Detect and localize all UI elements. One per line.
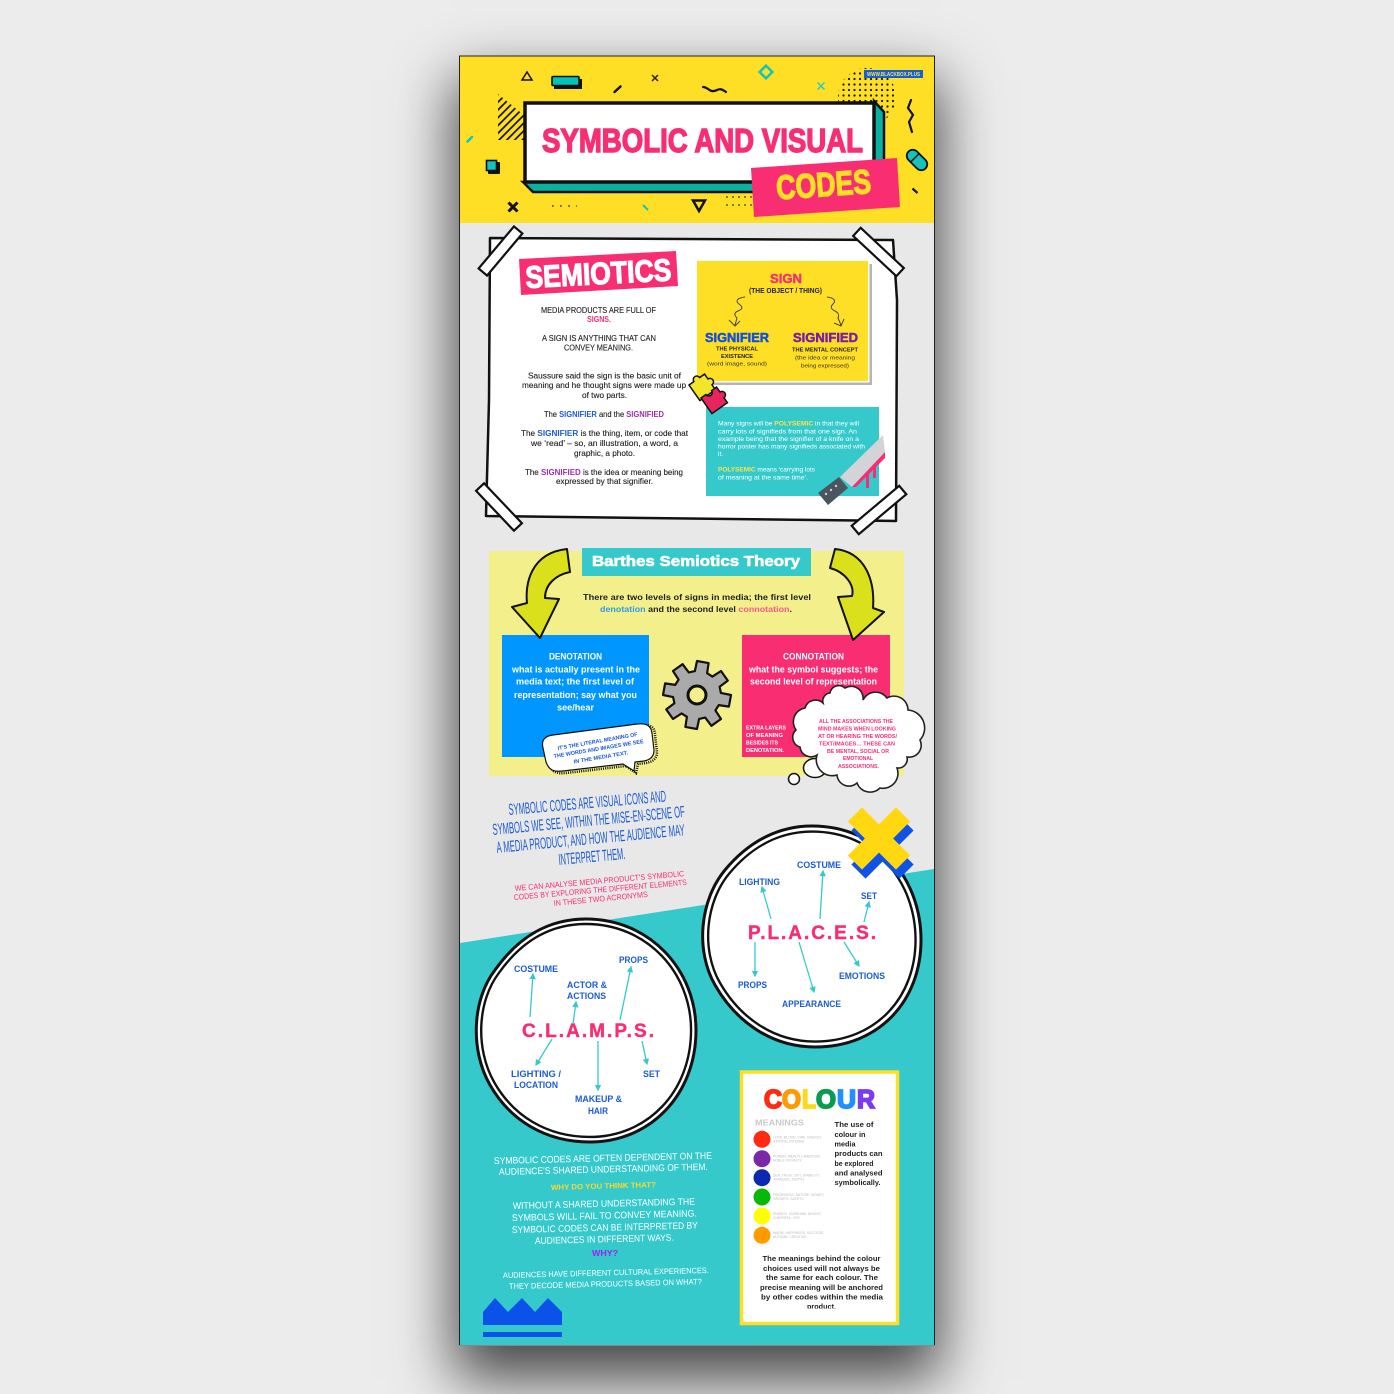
clamps labels: SET <box>643 1069 660 1080</box>
panel: colour card <box>742 1072 898 1324</box>
panel: polysemic box: example being that the signifier of a knife on a <box>718 436 859 443</box>
places labels <box>738 860 885 1010</box>
heading: colour: U <box>837 1084 856 1114</box>
callout: associations thought cloud: ASSOCIATIONS. <box>838 764 879 770</box>
text: A MEDIA PRODUCT, AND HOW THE AUDIENCE MAY <box>496 822 686 857</box>
icon: teal cross <box>818 82 824 90</box>
text block: semiotics intro: meaning and he thought signs were made up <box>522 381 687 390</box>
panel: polysemic box: carry lots of signifieds from that one sign. An <box>718 428 857 436</box>
text block: analyse acronyms: WE CAN ANALYSE MEDIA PRODUCT'S SYMBOLIC <box>514 869 685 893</box>
arrow: right curved <box>830 549 884 640</box>
clamps labels: ACTIONS <box>567 991 606 1002</box>
icon: small teal slash <box>643 205 648 210</box>
panel: clamps circle <box>476 919 696 1142</box>
heading: colour: R <box>857 1084 875 1114</box>
clamps labels: LOCATION <box>514 1080 558 1091</box>
codes banner: CODES <box>775 163 872 207</box>
text block: two levels: denotation and the second level connotation . <box>600 604 792 614</box>
colour meanings list <box>773 1136 824 1239</box>
panel: sign diagram card <box>696 260 872 385</box>
panel: denotation: media text; the first level of <box>516 676 635 686</box>
text block: semiotics intro: CONVEY MEANING. <box>564 344 633 352</box>
places labels: APPEARANCE <box>782 999 841 1010</box>
tape: top right <box>853 228 904 276</box>
icon: pill <box>904 147 930 173</box>
text block: shared understanding: WITHOUT A SHARED UNDERSTANDING THE <box>513 1197 695 1212</box>
signifier column: (word image, sound) <box>707 362 767 368</box>
icon: zigzag <box>908 100 913 132</box>
panel: polysemic box: it. <box>718 451 723 458</box>
text block: semiotics intro: MEDIA PRODUCTS ARE FULL OF <box>541 306 656 315</box>
meanings subheading: MEANINGS <box>755 1118 805 1128</box>
icon: hatched triangle <box>498 94 525 140</box>
text block: shared understanding: SYMBOLIC CODES CAN BE INTERPRETED BY <box>512 1220 699 1236</box>
text block: colour anchoring: by other codes within the media <box>761 1292 884 1302</box>
text block: semiotics intro: The SIGNIFIER and the SIGNIFIED <box>544 410 664 419</box>
clamps labels: COSTUME <box>514 964 558 975</box>
icon: small cross <box>652 75 658 81</box>
title box <box>523 101 884 192</box>
callout: literal meaning speech bubble: IN THE MEDIA TEXT. <box>573 750 629 765</box>
sign label: SIGN <box>770 272 802 286</box>
clamps arrows <box>530 967 647 1090</box>
panel: polysemic box: horror poster has many signifieds associated with <box>718 444 865 450</box>
text block: two levels: There are two levels of signs in media; the first level <box>583 592 811 602</box>
clamps labels: MAKEUP & <box>575 1094 622 1105</box>
panel: denotation: what is actually present in the <box>511 664 640 674</box>
callout: literal meaning speech bubble: IT'S THE LITERAL MEANING OF <box>557 732 639 752</box>
icon: squiggle <box>703 87 726 92</box>
clamps labels <box>511 955 660 1117</box>
clamps labels: ACTOR & <box>567 980 607 991</box>
signified column <box>792 331 858 370</box>
signifier column: THE PHYSICAL <box>716 346 758 352</box>
icon: cube <box>486 160 500 174</box>
icon: puzzle pieces <box>687 369 730 414</box>
text block: shared understanding: WHY DO YOU THINK THAT? <box>551 1180 656 1192</box>
icon: teal diamond <box>760 66 772 78</box>
text block: shared understanding <box>494 1151 712 1291</box>
signified column: SIGNIFIED <box>793 331 858 345</box>
panel: semiotics paper <box>476 226 906 534</box>
sign subtitle: (THE OBJECT / THING) <box>749 288 822 295</box>
callout: associations thought cloud: BE MENTAL, SOCIAL OR <box>827 749 889 755</box>
panel: connotation: EXTRA LAYERS <box>746 726 786 732</box>
clamps labels: PROPS <box>619 955 648 966</box>
signifier column <box>705 331 769 368</box>
text block: shared understanding: WHY? <box>592 1249 618 1258</box>
codes banner <box>751 158 900 217</box>
callout: associations thought cloud <box>788 686 925 792</box>
icon: teal 3D bar <box>552 76 582 89</box>
text block: shared understanding: AUDIENCES HAVE DIFFERENT CULTURAL EXPERIENCES. <box>503 1266 709 1280</box>
places labels: SET <box>861 891 877 902</box>
text block: colour anchoring: precise meaning will be anchored <box>760 1283 883 1292</box>
website label <box>864 70 923 78</box>
text block: semiotics intro <box>521 306 689 486</box>
poster body background <box>460 56 934 1345</box>
colour meanings list: GROWTH, SAFETY. <box>773 1197 804 1201</box>
text: SYMBOLS WE SEE, WITHIN THE MISE-EN-SCENE OF <box>492 804 686 839</box>
colour meanings list: ENERGY, SUNSHINE, BRIGHT, <box>773 1212 822 1216</box>
text block: colour anchoring: choices used will not always be <box>763 1264 880 1273</box>
text block: semiotics intro: The SIGNIFIER is the thing, item, or code that <box>521 429 689 438</box>
text block: colour analysis: The use of <box>834 1120 874 1129</box>
icon: dot grid <box>726 196 752 206</box>
icon: bloody knife <box>818 435 885 505</box>
text block: semiotics intro: of two parts. <box>582 391 627 400</box>
text block: colour analysis: be explored <box>834 1159 874 1168</box>
text block: colour anchoring: The meanings behind the colour <box>762 1254 881 1263</box>
tape: bottom left <box>476 483 522 531</box>
icon: gear <box>663 661 731 729</box>
text block: semiotics intro: The SIGNIFIED is the idea or meaning being <box>525 468 683 477</box>
icon: slash <box>614 86 620 92</box>
website label: WWW.BLACKBOX.PLUS <box>867 72 921 78</box>
arrow: to signifier <box>729 297 745 326</box>
text block: semiotics intro: we ‘read’ – so, an illustration, a word, a <box>530 439 679 448</box>
callout: associations thought cloud: MIND MAKES WHEN LOOKING <box>818 726 896 732</box>
icon: black cross <box>508 202 518 212</box>
panel: polysemic box: of meaning at the same time’. <box>718 474 808 482</box>
icon: outline triangle <box>522 72 532 80</box>
colour meanings list: CHEERFUL, JOY. <box>773 1216 800 1220</box>
icon: yellow and blue cross <box>831 790 931 896</box>
text block: colour analysis: and analysed <box>834 1168 883 1178</box>
tape: bottom right <box>852 486 906 534</box>
callout: associations thought cloud: EMOTIONAL <box>843 756 874 762</box>
colour meanings list: FRESHNESS, NATURE, MONEY, <box>773 1193 824 1197</box>
arrow: to signified <box>827 297 844 326</box>
panel: barthes semiotics theory <box>489 548 925 792</box>
signifier column: EXISTENCE <box>721 354 753 360</box>
colour meanings list: WARM, HAPPINESS, SUCCESS, <box>773 1231 824 1235</box>
clamps acronym: C.L.A.M.P.S. <box>522 1021 654 1042</box>
callout: literal meaning speech bubble: THE WORDS AND IMAGES WE SEE <box>553 739 644 760</box>
text block: two levels <box>583 592 811 614</box>
text block: shared understanding: SYMBOLS WILL FAIL TO CONVEY MEANING. <box>512 1208 697 1224</box>
icon: blue crown shape <box>483 1298 562 1337</box>
text block: semiotics intro: expressed by that signifier. <box>556 477 653 486</box>
colour meanings list: AUTUMN, CREATIVE. <box>773 1235 807 1239</box>
colour meanings list: STRONG, INTENSE. <box>773 1140 805 1144</box>
panel: denotation: representation; say what you <box>514 690 637 700</box>
text block: colour anchoring: product. <box>807 1302 836 1311</box>
places arrows <box>755 871 869 992</box>
text block: colour analysis: media <box>834 1140 856 1148</box>
places labels: EMOTIONS <box>839 971 885 982</box>
text block: shared understanding: AUDIENCES IN DIFFERENT WAYS. <box>535 1233 674 1247</box>
heading: semiotics: SEMIOTICS <box>525 252 672 295</box>
text block: semiotics intro: Saussure said the sign is the basic unit of <box>528 372 682 380</box>
text block: colour anchoring <box>760 1254 884 1311</box>
callout: associations thought cloud: TEXT/IMAGES… THESE CAN <box>819 742 895 748</box>
text block: symbolic codes definition: INTERPRET THEM. <box>558 846 626 869</box>
icon: dotted circle <box>838 68 896 126</box>
colour meanings list: NOBLE, ROYALTY. <box>773 1158 802 1162</box>
panel: denotation: see/hear <box>557 702 594 712</box>
text block: analyse acronyms: CODES BY EXPLORING THE DIFFERENT ELEMENTS <box>513 878 687 902</box>
text block: colour analysis: colour in <box>834 1130 866 1139</box>
text block: symbolic codes definition <box>492 789 686 869</box>
signified column: THE MENTAL CONCEPT <box>792 348 858 354</box>
text block: shared understanding: AUDIENCE'S SHARED UNDERSTANDING OF THEM. <box>499 1162 708 1178</box>
icon: dot row <box>552 205 577 207</box>
text block: symbolic codes definition: SYMBOLIC CODES ARE VISUAL ICONS AND <box>508 789 667 819</box>
text block: semiotics intro: A SIGN IS ANYTHING THAT CAN <box>542 334 656 343</box>
heading: colour: O <box>782 1084 801 1114</box>
colour meanings list: POWER, WEALTH, AMBITION, <box>773 1154 821 1158</box>
tape: top left <box>479 226 522 276</box>
places acronym: P.L.A.C.E.S. <box>748 923 876 944</box>
text block: shared understanding: THEY DECODE MEDIA PRODUCTS BASED ON WHAT? <box>509 1277 702 1291</box>
text block: semiotics intro: graphic, a photo. <box>574 449 635 458</box>
text block: colour anchoring: the same for each colour. The <box>766 1273 878 1282</box>
panel: places circle <box>703 826 921 1047</box>
text block: colour analysis <box>834 1120 883 1187</box>
signified column: (the idea or meaning <box>795 356 855 362</box>
places labels: PROPS <box>738 980 767 991</box>
signifier column: SIGNIFIER <box>705 331 769 345</box>
heading: colour: L <box>802 1084 816 1114</box>
text block: colour analysis: products can <box>834 1149 883 1158</box>
heading: barthes: Barthes Semiotics Theory <box>592 553 801 570</box>
panel: connotation: CONNOTATION <box>783 652 844 662</box>
heading: colour: C <box>764 1084 782 1114</box>
panel: denotation <box>502 635 649 757</box>
signified column: being expressed) <box>801 364 849 370</box>
teal lower section background <box>460 869 934 1345</box>
callout: literal meaning speech bubble <box>542 724 657 773</box>
panel: denotation: DENOTATION <box>549 652 602 662</box>
heading: colour: O <box>816 1084 836 1114</box>
clamps labels: HAIR <box>588 1106 608 1117</box>
callout: associations thought cloud: ALL THE ASSOCIATIONS THE <box>819 719 893 725</box>
colour swatches <box>754 1131 770 1244</box>
text block: shared understanding: SYMBOLIC CODES ARE OFTEN DEPENDENT ON THE <box>494 1151 712 1167</box>
text block: colour analysis: symbolically. <box>834 1178 880 1187</box>
panel: connotation <box>742 635 890 757</box>
icon: down triangle <box>693 200 705 211</box>
icon: left teal slash <box>468 137 472 142</box>
places labels: COSTUME <box>797 860 841 871</box>
heading: barthes <box>582 548 811 576</box>
panel: connotation: OF MEANING <box>746 733 783 739</box>
arrow: left curved <box>512 549 570 638</box>
panel: polysemic box: POLYSEMIC means ‘carrying lots <box>718 466 816 474</box>
panel: connotation: what the symbol suggests; the <box>748 664 878 674</box>
colour meanings list: LOVE, BLOOD, FIRE, ENERGY, <box>773 1136 822 1140</box>
panel: connotation: BESIDES ITS <box>746 740 778 746</box>
colour meanings list: TRANQUIL, DEPTH. <box>773 1178 805 1182</box>
panel: polysemic box <box>706 407 879 496</box>
colour meanings list: SEA, TRUST, SKY, STABILITY, <box>773 1174 820 1178</box>
header band <box>460 56 934 223</box>
panel: polysemic box: Many signs will be POLYSEMIC in that they will <box>718 420 860 428</box>
panel: connotation: second level of representation <box>750 676 877 686</box>
icon: right slash <box>912 188 918 193</box>
clamps labels: LIGHTING / <box>511 1069 561 1080</box>
text block: analyse acronyms <box>513 869 687 908</box>
heading: colour <box>764 1084 875 1114</box>
panel: connotation: DENOTATION. <box>746 748 784 754</box>
text block: analyse acronyms: IN THESE TWO ACRONYMS <box>553 890 648 908</box>
places labels: LIGHTING <box>739 877 780 888</box>
title text: SYMBOLIC AND VISUAL <box>542 122 863 159</box>
callout: associations thought cloud: AT OR HEARING THE WORDS/ <box>818 734 897 740</box>
text block: semiotics intro: SIGNS. <box>587 315 611 324</box>
